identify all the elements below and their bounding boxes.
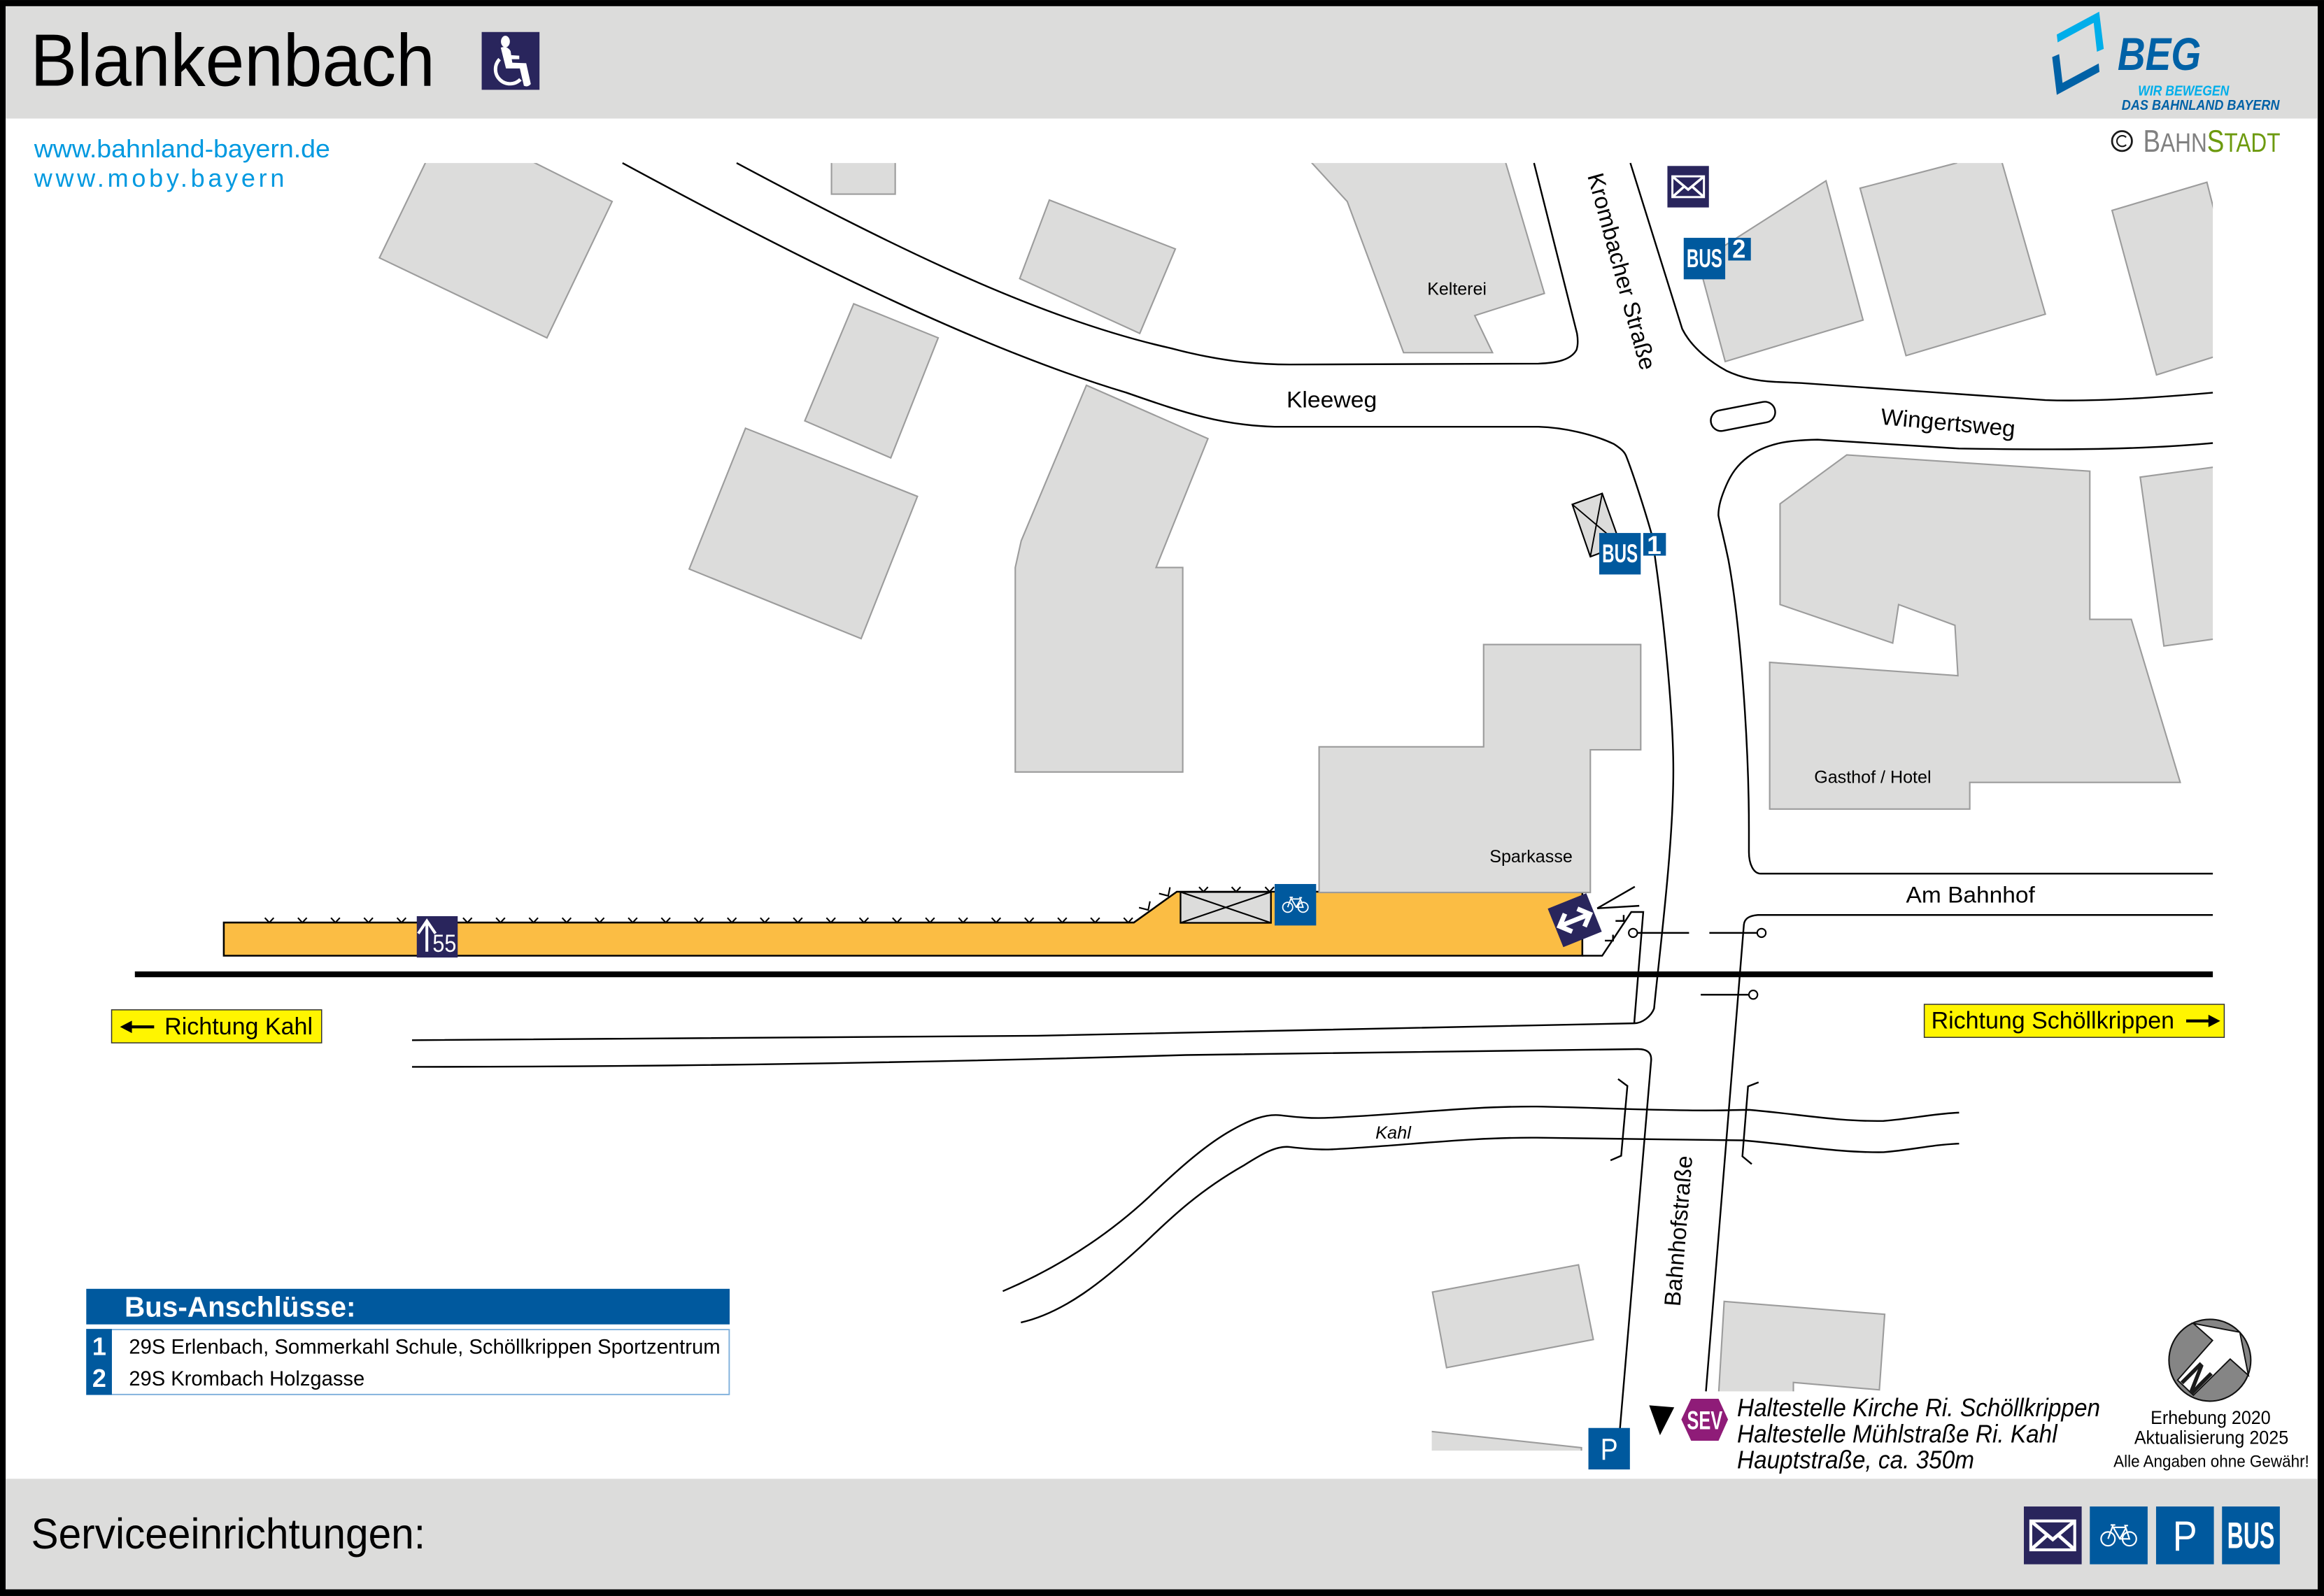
replacement bus stop notes: Haltestelle Mühlstraße Ri. Kahl [1737, 1420, 2058, 1448]
logo: BEG: DAS BAHNLAND BAYERN [2122, 98, 2281, 113]
icon: platform height 55: 55 [432, 930, 456, 957]
map: buildings [379, 148, 2232, 1458]
road outlines [412, 163, 2213, 1428]
icon: post box [1667, 166, 1709, 208]
icon: platform height 55 [417, 916, 458, 957]
marker: replacement bus direction triangle [1649, 1405, 1674, 1435]
street and place labels: Gasthof / Hotel [1814, 768, 1932, 788]
icon: platform exit [1547, 893, 1602, 947]
stop number 1: 1 [1647, 530, 1661, 560]
icon: parking: P [1601, 1433, 1618, 1467]
icon: north arrow [2169, 1319, 2251, 1402]
platform end ramp [1582, 887, 1643, 1023]
panel: header band [6, 6, 2318, 119]
replacement bus stop notes: Haltestelle Kirche Ri. Schöllkrippen [1737, 1393, 2100, 1422]
direction sign: Richtung Kahl [112, 1010, 322, 1043]
street and place labels: Kahl [1375, 1123, 1412, 1143]
street and place labels: Bahnhofstraße [1659, 1155, 1697, 1307]
bus shelter [1572, 494, 1621, 557]
icon: SEV replacement bus [1681, 1399, 1728, 1441]
logo: BEG: WIR BEWEGEN [2138, 84, 2230, 99]
icon: bus: BUS [1602, 539, 1638, 568]
icon: wheelchair accessible [482, 32, 539, 90]
panel: footer band services [6, 1479, 2318, 1589]
legend table: 1 [92, 1332, 106, 1360]
bicycle parking shelter [1180, 892, 1271, 922]
building: Gasthof / Hotel [1770, 455, 2180, 809]
platform [224, 887, 1582, 956]
icon: north arrow: N [2173, 1355, 2220, 1402]
icon: bus: BUS [1687, 244, 1722, 273]
logo: BEG [2052, 12, 2281, 113]
bus stop 1 [1572, 494, 1666, 574]
icon: parking [1589, 1428, 1630, 1469]
icon: parking [2156, 1506, 2214, 1565]
website links [34, 134, 330, 192]
stop number 2: 2 [1732, 234, 1745, 264]
icon: parking: P [2173, 1512, 2197, 1560]
direction sign: Richtung Schöllkrippen: Richtung Schöllkrippen [1932, 1007, 2174, 1034]
platform fence ticks [265, 887, 1274, 922]
icon: bus: BUS [2227, 1516, 2274, 1557]
street and place labels [1287, 170, 2036, 1307]
logo: BEG: BEG [2118, 29, 2201, 80]
icon: SEV replacement bus: SEV [1687, 1405, 1722, 1434]
survey note: Erhebung 2020 [2151, 1407, 2271, 1428]
survey note: Aktualisierung 2025 [2134, 1427, 2288, 1448]
building: Kelterei [1311, 163, 1545, 354]
legend heading: Bus-Anschlüsse: [125, 1291, 355, 1323]
street and place labels: Kleeweg [1287, 387, 1377, 413]
legend table: 29S Krombach Holzgasse [129, 1367, 364, 1390]
bus stop 2 [1684, 234, 1751, 279]
footer heading: Serviceeinrichtungen: [31, 1510, 425, 1558]
street and place labels: Wingertsweg [1880, 404, 2016, 441]
replacement bus stop notes: Hauptstraße, ca. 350m [1737, 1446, 1974, 1474]
survey note: Alle Angaben ohne Gewähr! [2113, 1452, 2309, 1471]
building: strip at bottom [1431, 1431, 1582, 1451]
building: Sparkasse [1319, 645, 1641, 892]
street and place labels: Am Bahnhof [1906, 881, 2036, 907]
railway track [135, 971, 2213, 977]
website links: www.moby.bayern [34, 164, 284, 192]
replacement bus stop notes [1737, 1393, 2100, 1474]
legend table [86, 1329, 729, 1395]
legend table: 2 [92, 1364, 106, 1392]
street and place labels: Kelterei [1427, 280, 1487, 299]
direction sign: Richtung Schöllkrippen [1925, 1004, 2224, 1037]
icon: bicycle parking [2090, 1506, 2148, 1565]
signals [1629, 929, 1766, 999]
river: Kahl [1002, 1079, 1959, 1323]
street and place labels: Sparkasse [1489, 847, 1573, 867]
copyright BahnStadt: BAHNSTADT [2144, 124, 2281, 159]
title: Blankenbach [30, 19, 435, 101]
icon: post box [2024, 1506, 2082, 1565]
icon: bicycle parking [1275, 884, 1316, 925]
survey note [2113, 1407, 2309, 1471]
direction sign: Richtung Kahl: Richtung Kahl [164, 1013, 313, 1040]
panel: bus connections legend [86, 1289, 730, 1395]
icon: bus [2222, 1506, 2280, 1565]
website links: www.bahnland-bayern.de [34, 134, 330, 163]
legend table: 29S Erlenbach, Sommerkahl Schule, Schöllkrippen Sportzentrum [129, 1335, 721, 1358]
street and place labels: Krombacher Straße [1582, 170, 1661, 373]
legend heading [86, 1289, 730, 1325]
